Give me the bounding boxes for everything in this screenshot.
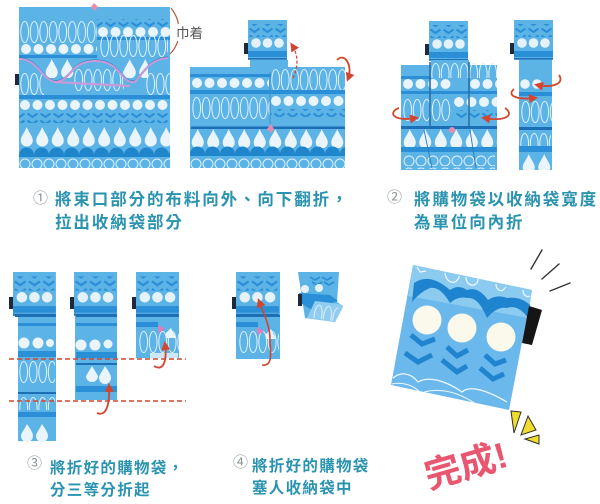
arrow: fold bottom third (97, 386, 109, 414)
arrow: right side folds inward (484, 108, 509, 119)
text: step 1 instructions: 拉出收納袋部分 (55, 212, 184, 232)
heading: completed: 完成! (420, 434, 512, 497)
text: step 1 instructions: 將束口部分的布料向外、向下翻折， (55, 189, 349, 209)
text: step 2 instructions: 為單位向內折 (414, 212, 524, 232)
illustration: bottom third folded up (70, 272, 117, 400)
illustration: bag half stuffed into pouch (298, 272, 343, 322)
illustration: full strip (9, 272, 56, 442)
number 1: ① (33, 190, 48, 207)
illustration: finished square pouch (391, 265, 532, 410)
arrow: left side folds inward (393, 108, 416, 119)
label: drawstring pouch: 巾着 (176, 25, 203, 41)
text: step 3 instructions (50, 459, 184, 499)
illustration: folded again (132, 272, 179, 358)
panel: step 2 (387, 20, 598, 232)
number 2: ② (387, 189, 402, 206)
guide: lower dashed fold line (9, 400, 186, 402)
icon: yellow burst triangles (511, 411, 539, 444)
text: step 4 instructions: 塞人收納袋中 (252, 478, 353, 497)
number 4: ④ (233, 454, 248, 471)
number 3: ③ (27, 455, 42, 472)
guide: upper dashed fold line (9, 358, 186, 360)
arrow: right edge folds (537, 75, 560, 86)
panel: step 1 (15, 3, 350, 232)
icon: black label (522, 306, 542, 345)
panel: step 3 (9, 272, 186, 499)
arrow: left edge folds (511, 89, 535, 99)
arrow: pull pouch upward (292, 45, 297, 78)
illustration: opened bag with drawstring pouch (15, 3, 170, 168)
label: drawstring pouch (170, 8, 205, 54)
text: step 3 instructions: 分三等分折起 (50, 480, 151, 499)
text: step 1 instructions (55, 189, 349, 232)
illustration: bag with pouch pulled out (190, 20, 345, 168)
panel: step 4 (232, 272, 370, 497)
text: step 4 instructions (252, 457, 370, 497)
illustration: folded bag with insertion arrow (232, 272, 280, 359)
arrow: fold middle third (154, 344, 166, 368)
illustration: side folded strip (510, 20, 553, 170)
arrow: fold outward and down (337, 58, 350, 79)
arrow: push into pouch (259, 301, 271, 365)
illustration: both sides before folding inward (401, 21, 497, 170)
panel: finished pouch (391, 250, 570, 497)
icon: sparkle lines (531, 250, 570, 291)
text: step 2 instructions (414, 189, 598, 232)
text: step 4 instructions: 將折好的購物袋 (252, 457, 370, 475)
text: step 2 instructions: 將購物袋以收納袋寬度 (414, 189, 598, 209)
text: step 3 instructions: 將折好的購物袋， (50, 459, 184, 477)
